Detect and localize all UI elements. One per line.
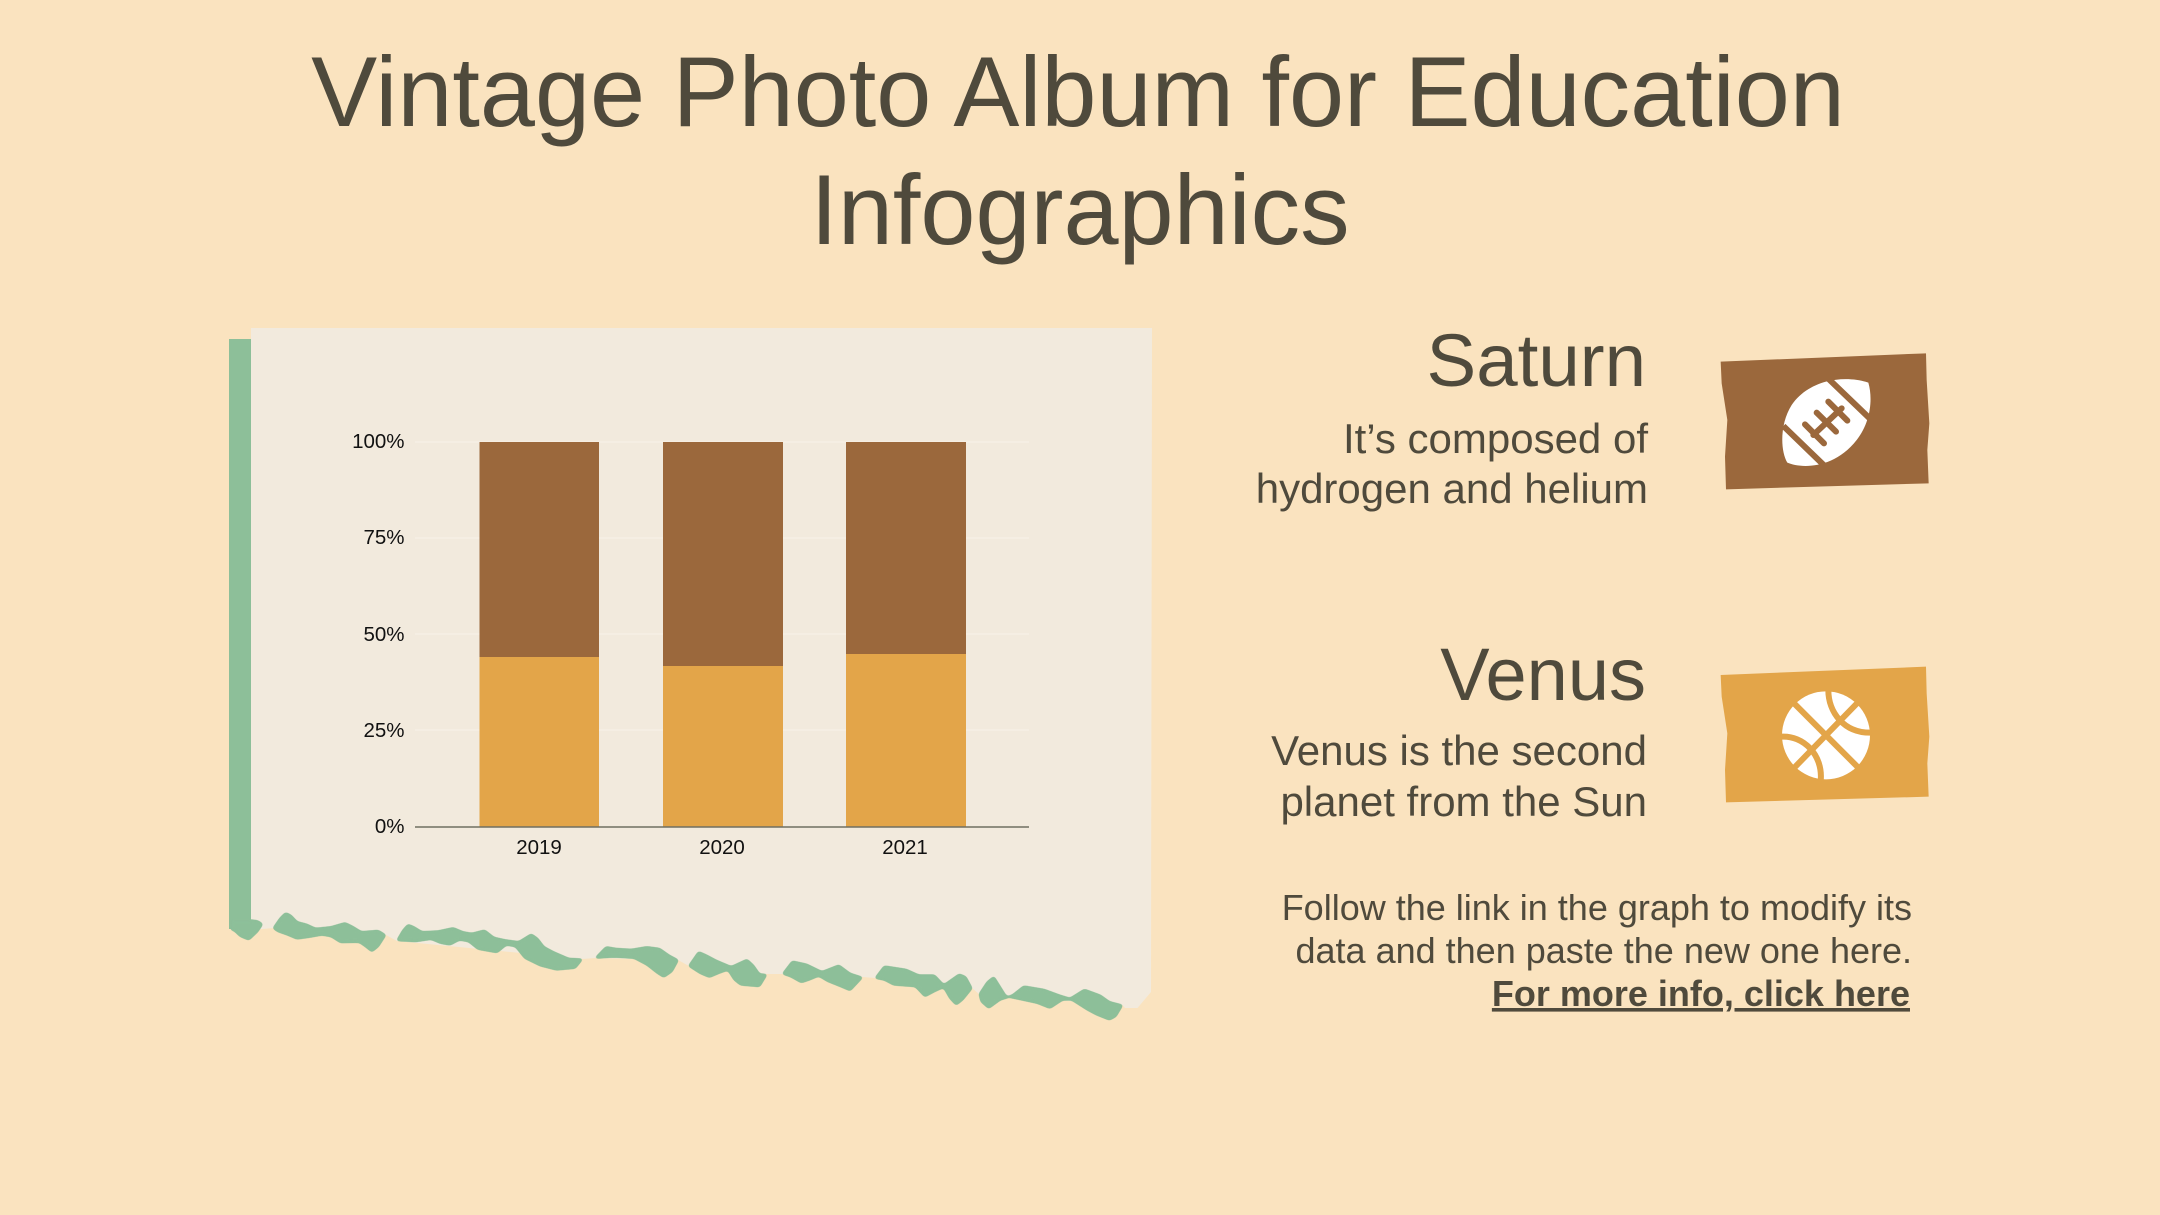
green album spine — [229, 339, 251, 929]
Venus heading: Venus — [1440, 633, 1646, 716]
Saturn description: hydrogen and helium — [1256, 465, 1648, 512]
footer note: Follow the link in the graph to modify its — [1282, 887, 1912, 928]
bar 2021 — [846, 442, 966, 827]
Venus description: Venus is the second — [1271, 727, 1647, 774]
x axis labels: 2019 — [516, 836, 562, 859]
y axis labels: 25% — [363, 719, 404, 742]
y axis labels — [352, 430, 404, 838]
link: more info: For more info, click here — [1492, 973, 1910, 1014]
Venus description — [1271, 727, 1647, 825]
stacked bar chart — [352, 430, 1029, 859]
x axis labels — [516, 836, 928, 859]
icon: football on brown tape — [1721, 353, 1929, 489]
icon: basketball on orange tape — [1721, 667, 1929, 802]
Saturn description: It’s composed of — [1343, 415, 1648, 462]
y axis labels: 100% — [352, 430, 404, 453]
title: Vintage Photo Album for Education — [311, 36, 1845, 147]
y axis labels: 50% — [363, 623, 404, 646]
y axis labels: 0% — [375, 815, 404, 838]
torn green backing strip — [231, 913, 1122, 1020]
footer note — [1282, 887, 1912, 1014]
bar 2020 — [663, 442, 783, 827]
Saturn heading: Saturn — [1426, 319, 1646, 402]
title: Infographics — [810, 154, 1350, 265]
panel: torn photo album page — [229, 328, 1152, 1020]
x axis labels: 2021 — [882, 836, 928, 859]
album page paper — [251, 328, 1152, 1008]
Saturn description — [1256, 415, 1648, 512]
x axis labels: 2020 — [699, 836, 745, 859]
bar 2019 — [480, 442, 599, 827]
y axis labels: 75% — [363, 526, 404, 549]
Venus description: planet from the Sun — [1280, 778, 1647, 825]
title — [311, 36, 1845, 265]
footer note: data and then paste the new one here. — [1296, 930, 1912, 971]
